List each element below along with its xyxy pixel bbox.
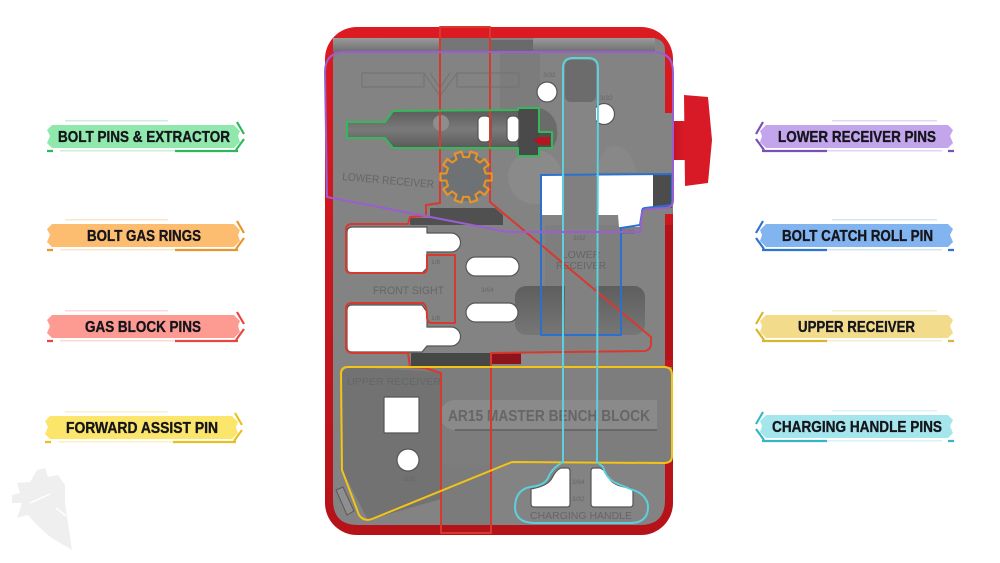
central slot xyxy=(565,60,596,102)
engraved labels: 3/32 xyxy=(600,95,613,102)
outline: upper receiver (red) xyxy=(346,27,651,533)
lower receiver pocket xyxy=(545,225,620,287)
engraved labels xyxy=(342,72,635,522)
gray block face xyxy=(333,38,673,525)
engraved labels: LOWER RECEIVER xyxy=(342,171,434,191)
label: gas block pins xyxy=(47,310,244,342)
label: forward assist pin xyxy=(45,411,242,442)
dark channel below front sight xyxy=(411,353,490,368)
engraved labels: 3/32 xyxy=(543,72,556,79)
gear recess xyxy=(442,153,490,201)
engraved labels: 3/32 xyxy=(572,496,585,503)
engraved labels: FRONT SIGHT xyxy=(373,285,444,297)
engraved labels: 3/32 xyxy=(573,235,586,242)
engraved labels: UPPER RECEIVER xyxy=(347,376,441,388)
engraved labels: 3/64 xyxy=(572,479,585,486)
watermark logo xyxy=(12,468,72,550)
engraved labels: LOWER xyxy=(562,249,601,261)
engraved labels: 3/32 xyxy=(403,476,416,483)
bolt recess xyxy=(347,111,518,148)
outline: upper receiver area (yellow) xyxy=(341,367,672,520)
outline: charging handle pins (cyan) xyxy=(515,58,648,523)
label: charging handle pins xyxy=(756,410,954,442)
label: bolt gas rings xyxy=(47,219,244,250)
outline: bolt pins & extractor (green) xyxy=(347,108,552,156)
knob xyxy=(670,95,712,186)
label: forward assist pin: FORWARD ASSIST PIN xyxy=(66,420,218,437)
outline: bolt gas rings (orange gear) xyxy=(432,144,500,210)
label: charging handle pins: CHARGING HANDLE PINS xyxy=(772,419,942,436)
label: lower receiver pins xyxy=(756,120,954,152)
outline: lower receiver pins (purple) xyxy=(325,52,673,232)
top opening of receiver cavity xyxy=(541,175,673,360)
label: upper receiver xyxy=(756,310,954,342)
engraved labels: RECEIVER xyxy=(556,260,606,272)
label: bolt catch roll pin: BOLT CATCH ROLL PIN xyxy=(782,228,933,245)
logo engraving xyxy=(362,73,519,96)
raised boss xyxy=(508,150,562,204)
label: bolt catch roll pin xyxy=(756,219,954,250)
white through-holes xyxy=(347,82,633,507)
engraved labels: 3/64 xyxy=(481,287,494,294)
bench block name plate: AR15 MASTER BENCH BLOCK xyxy=(448,408,651,425)
label: upper receiver: UPPER RECEIVER xyxy=(798,319,915,336)
lower-left shelf and recesses xyxy=(410,208,503,225)
engraved labels: 1/8 xyxy=(431,315,440,322)
engraved labels: CHARGING HANDLE xyxy=(530,510,632,522)
bench block illustration xyxy=(325,27,712,535)
outline: bolt catch roll pin (blue) xyxy=(541,174,672,335)
engraved labels: 1/8 xyxy=(431,259,440,266)
engraved labels: 3/32 xyxy=(622,229,635,236)
red block body xyxy=(325,27,673,535)
upper receiver floor xyxy=(342,367,672,520)
label: bolt gas rings: BOLT GAS RINGS xyxy=(87,228,201,245)
label: bolt pins & extractor xyxy=(47,120,244,152)
label: gas block pins: GAS BLOCK PINS xyxy=(85,319,201,336)
bench block name plate xyxy=(440,400,657,430)
label: lower receiver pins: LOWER RECEIVER PINS xyxy=(778,129,936,146)
label: bolt pins & extractor: BOLT PINS & EXTRACTOR xyxy=(58,129,230,146)
